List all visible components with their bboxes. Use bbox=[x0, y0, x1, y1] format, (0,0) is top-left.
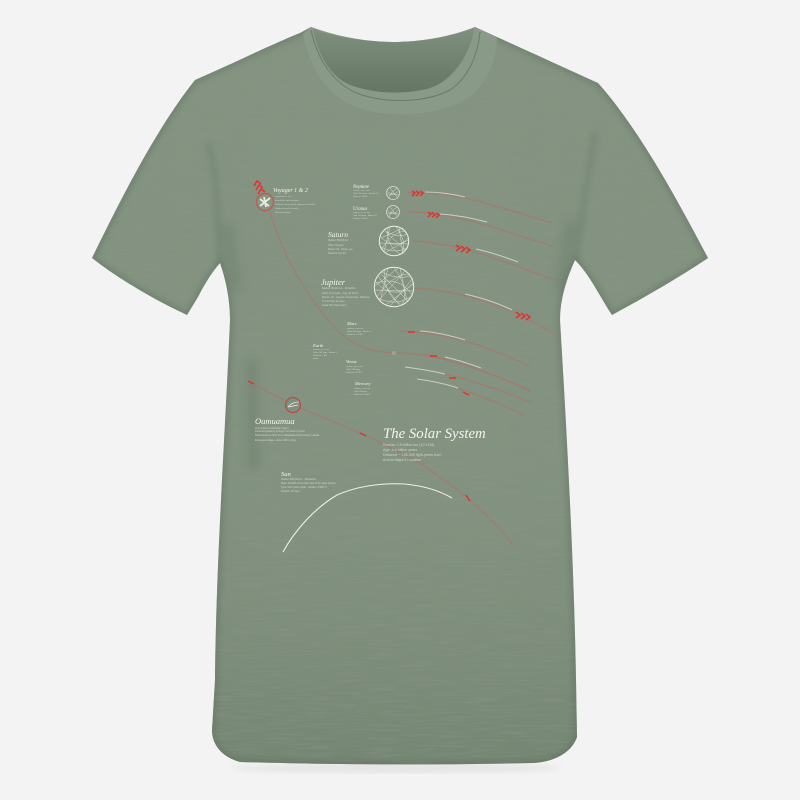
label: Mars: Orbit: 687 days · Moons: 2 bbox=[347, 330, 372, 333]
label: Voyager 1 & 2: Interstellar space probes bbox=[275, 199, 300, 202]
label: Uranus: Uranus bbox=[353, 207, 368, 212]
label: Mercury: Orbit: 88 days bbox=[354, 390, 367, 393]
label: Jupiter: Jupiter bbox=[321, 277, 346, 287]
label: Neptune: Neptune bbox=[352, 185, 370, 190]
planet: Saturn bbox=[379, 226, 409, 256]
sun arc bbox=[283, 484, 452, 552]
title details: Arrival Major's Location bbox=[383, 458, 421, 462]
trajectory: Oumuamua bbox=[248, 381, 513, 545]
title details: Distance ~ 146,000 light-years from bbox=[383, 453, 441, 457]
label: Saturn: Moons: 62 · Rings: yes bbox=[328, 248, 353, 251]
label: Jupiter: Radius: 69,911 km · 11 Earths bbox=[322, 287, 356, 290]
label: Jupiter: Orbit: 11.9 years · Day: 10 hours bbox=[322, 292, 359, 295]
label: Voyager 1 & 2: Still transmitting bbox=[275, 211, 291, 214]
Earth trajectory bbox=[425, 354, 530, 390]
Saturn trajectory bbox=[411, 241, 555, 280]
label: Sun: Sun bbox=[281, 471, 291, 478]
label: Venus: Orbit: 225 days bbox=[346, 368, 360, 371]
planet dot: Earth bbox=[392, 351, 396, 355]
label: Uranus: Orbit: 84 years · Moons: 27 bbox=[353, 214, 378, 217]
label: Sun: Mass: 99.86% of the total mass of the Solar System bbox=[281, 482, 336, 485]
planet: Neptune bbox=[386, 186, 400, 200]
label: Oumuamua: Oumuamua bbox=[255, 416, 295, 426]
label: Neptune: Orbit: 165 years · Moons: 14 bbox=[353, 192, 379, 195]
planet: Jupiter bbox=[374, 267, 414, 307]
t-shirt bbox=[90, 20, 710, 773]
trajectory: Voyager bbox=[254, 181, 530, 391]
collar seam bbox=[311, 30, 480, 100]
label: Voyager 1 & 2: Voyager 1 & 2 bbox=[273, 188, 308, 194]
sleeve seams bbox=[209, 140, 594, 220]
Jupiter trajectory bbox=[415, 288, 553, 333]
title details: Age: 4.6 billion years bbox=[383, 448, 417, 452]
label: Earth bbox=[312, 343, 338, 360]
Mercury trajectory bbox=[417, 379, 525, 416]
icon: Oumuamua bbox=[286, 398, 300, 412]
label: Mars: Distance: 1.5 AU bbox=[347, 333, 363, 336]
label: Mars bbox=[346, 321, 372, 336]
label: Saturn: Radius: 58,232 km bbox=[328, 239, 348, 242]
shirt shading bbox=[212, 692, 577, 764]
label: Venus: Radius: 6,052 km bbox=[346, 366, 362, 368]
label: Mars: Mars bbox=[346, 321, 357, 326]
label: Earth: Distance: 1 AU bbox=[313, 354, 327, 357]
label: Uranus: Radius: 25,362 km bbox=[353, 212, 370, 214]
label: Oumuamua bbox=[255, 416, 320, 442]
shirt hem shadow bbox=[231, 763, 561, 773]
label: Jupiter: Moons: 79 · Largest: Ganymede · Distance bbox=[322, 296, 370, 299]
icon: Voyager chevrons bbox=[254, 181, 265, 194]
title details: Radius: 1.5 trillion km (10 LYM) bbox=[383, 443, 434, 447]
title details bbox=[383, 443, 441, 462]
collar inner bbox=[313, 28, 474, 93]
label: Jupiter: Great Red Spot storm bbox=[322, 304, 346, 307]
label: Earth: Orbit: 365 days · Moons: 1 bbox=[313, 351, 338, 354]
label: Venus bbox=[346, 359, 362, 374]
label: Venus: Venus bbox=[346, 359, 357, 364]
label: Neptune bbox=[352, 185, 379, 198]
label: Mercury: Radius: 2,440 km bbox=[354, 388, 370, 390]
marker: Oumuamua end bbox=[466, 495, 470, 501]
label: Saturn bbox=[328, 230, 353, 255]
label: Oumuamua: First known interstellar object bbox=[255, 426, 289, 430]
label: Mercury bbox=[354, 381, 370, 396]
fold shading bbox=[226, 220, 572, 470]
label: Uranus bbox=[353, 207, 378, 220]
label: Saturn: Distance: 9.5 AU bbox=[328, 252, 346, 255]
Mars trajectory bbox=[400, 331, 530, 366]
label: Neptune: Distance: 30 AU bbox=[353, 195, 368, 198]
marker: Oumuamua middle bbox=[360, 433, 366, 436]
fabric texture bbox=[129, 268, 694, 757]
label: Mars: Radius: 3,389 km bbox=[347, 328, 363, 330]
Neptune trajectory bbox=[408, 191, 552, 223]
Venus trajectory bbox=[405, 367, 530, 402]
label: Jupiter bbox=[321, 277, 370, 307]
marker: Oumuamua start bbox=[248, 381, 254, 384]
label: Neptune: Radius: 24,622 km bbox=[353, 190, 370, 192]
planet trajectories bbox=[400, 191, 555, 416]
label: Voyager 1 & 2: Golden record on board bbox=[275, 207, 299, 210]
label: Oumuamua: Discovered in 2017 from Haleakala Observatory, Hawaii bbox=[255, 433, 320, 437]
icon: Voyager probe bbox=[256, 194, 274, 210]
label: Voyager 1 & 2: Farthest human-made objects from Earth bbox=[275, 203, 316, 206]
label: Sun bbox=[281, 471, 336, 493]
label: Voyager 1 & 2 bbox=[273, 188, 316, 214]
label: Earth: Earth bbox=[312, 343, 324, 348]
label: Uranus: Distance: 19 AU bbox=[353, 217, 368, 220]
Uranus trajectory bbox=[408, 212, 552, 246]
label: Voyager 1 & 2: Launched in 1977 bbox=[275, 196, 293, 198]
planet: Uranus bbox=[386, 206, 400, 218]
label: Oumuamua: Detected passing through the Solar System bbox=[255, 429, 305, 433]
label: Venus: Distance: 0.7 AU bbox=[346, 371, 362, 374]
label: Saturn: Saturn bbox=[328, 230, 348, 239]
label: Oumuamua: Elongated shape, about 400 m long bbox=[255, 438, 297, 442]
shirt edge shading bbox=[92, 27, 708, 764]
label: Earth: Home bbox=[313, 358, 319, 360]
label: Sun: Radius: 696,340 km · 109 Earths bbox=[281, 478, 317, 481]
label: Sun: Rotation: 25 days bbox=[281, 490, 300, 493]
label: Mercury: Distance: 0.4 AU bbox=[354, 393, 370, 396]
label: Earth: Radius: 6,371 km bbox=[313, 349, 329, 351]
label: Saturn: Orbit: 29 years bbox=[328, 244, 344, 247]
label: Mercury: Mercury bbox=[354, 381, 370, 386]
shirt body bbox=[92, 27, 708, 764]
label: Sun: Type: G2V yellow dwarf · Surface: 5,500 °C bbox=[281, 486, 327, 489]
label: Jupiter: 5.2 AU from the Sun bbox=[322, 300, 345, 303]
collar rib bbox=[303, 27, 497, 114]
title: The Solar System: The Solar System bbox=[383, 426, 486, 442]
